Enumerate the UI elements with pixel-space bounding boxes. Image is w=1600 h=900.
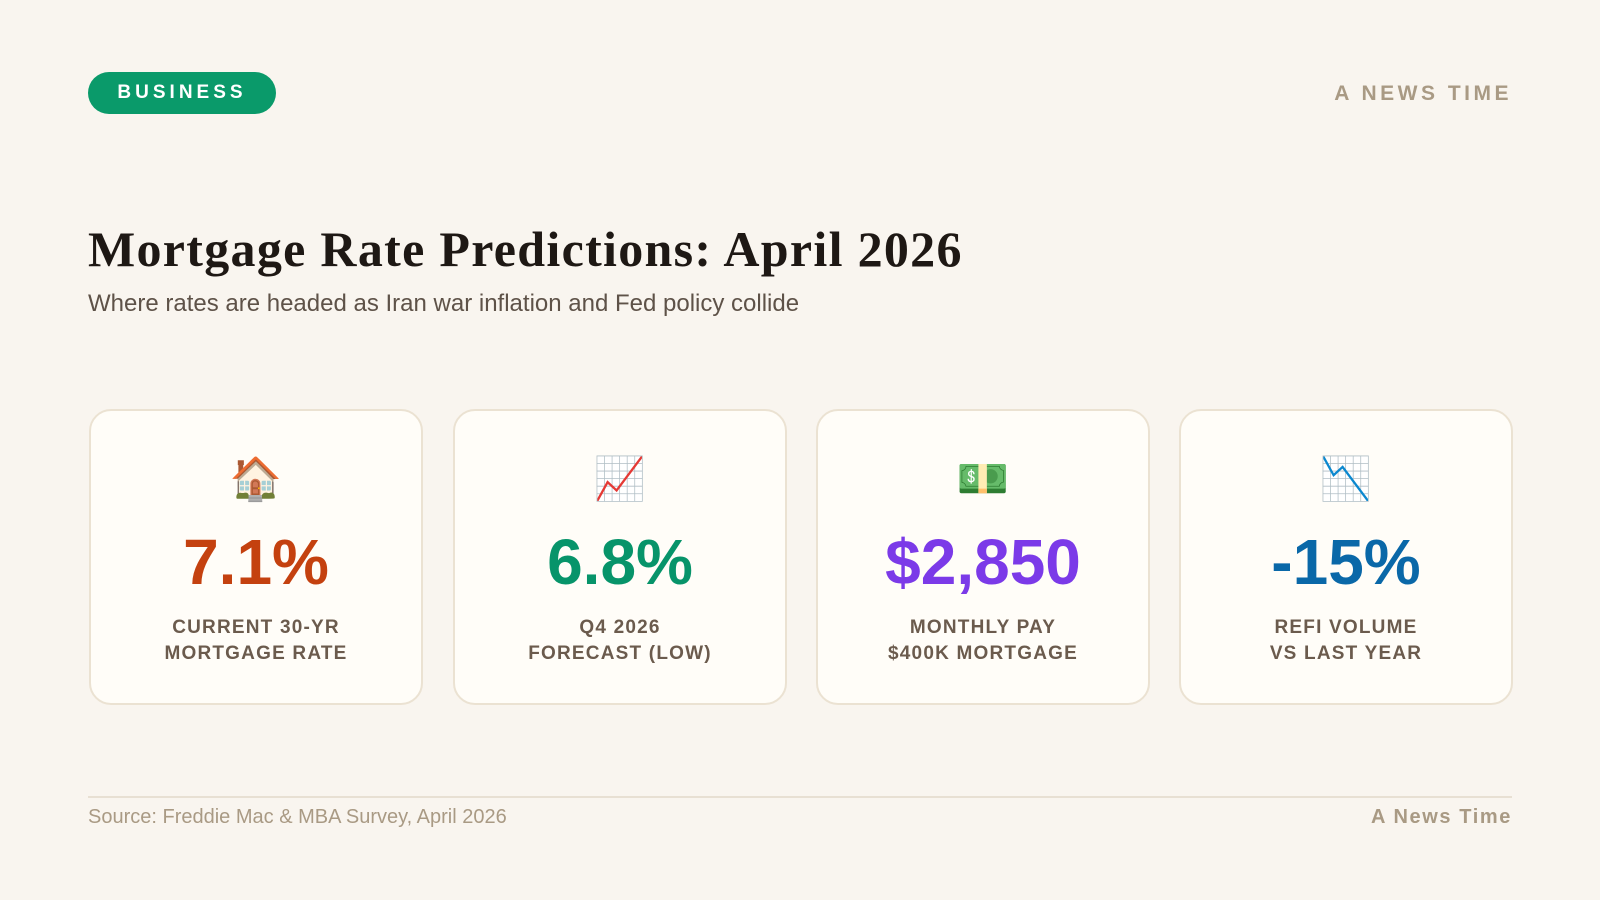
icon: chart down: 📉 — [1320, 455, 1372, 504]
stat: 6.8%: 6.8% — [547, 526, 693, 598]
label — [164, 617, 348, 664]
label: $400K MORTGAGE — [888, 643, 1078, 664]
icon: chart up: 📈 — [594, 455, 646, 504]
card: forecast — [453, 409, 787, 705]
title: Mortgage Rate Predictions: April 2026 — [88, 221, 963, 277]
label: FORECAST (LOW) — [528, 643, 712, 664]
label: REFI VOLUME — [1274, 617, 1418, 638]
stat: 7.1%: 7.1% — [183, 526, 329, 598]
subtitle: Where rates are headed as Iran war inflation and Fed policy collide — [88, 290, 799, 317]
label: VS LAST YEAR — [1270, 643, 1422, 664]
icon: house: 🏠 — [230, 455, 282, 504]
icon: money: 💵 — [957, 455, 1009, 504]
stat: $2,850: $2,850 — [885, 526, 1081, 598]
label: MONTHLY PAY — [910, 617, 1056, 638]
card: current rate — [89, 409, 423, 705]
badge: business: BUSINESS — [117, 82, 247, 103]
label — [1270, 617, 1422, 664]
label: MORTGAGE RATE — [164, 643, 348, 664]
stat: -15%: -15% — [1271, 526, 1421, 598]
label: CURRENT 30-YR — [172, 617, 340, 638]
card: monthly pay — [816, 409, 1150, 705]
footer brand: A News Time — [1371, 806, 1512, 828]
label: Q4 2026 — [579, 617, 661, 638]
label — [888, 617, 1078, 664]
source text: Source: Freddie Mac & MBA Survey, April 2026 — [88, 806, 507, 828]
card: refi volume — [1179, 409, 1513, 705]
badge: business — [88, 72, 276, 114]
brand header: A NEWS TIME — [1334, 82, 1512, 105]
label — [528, 617, 712, 664]
